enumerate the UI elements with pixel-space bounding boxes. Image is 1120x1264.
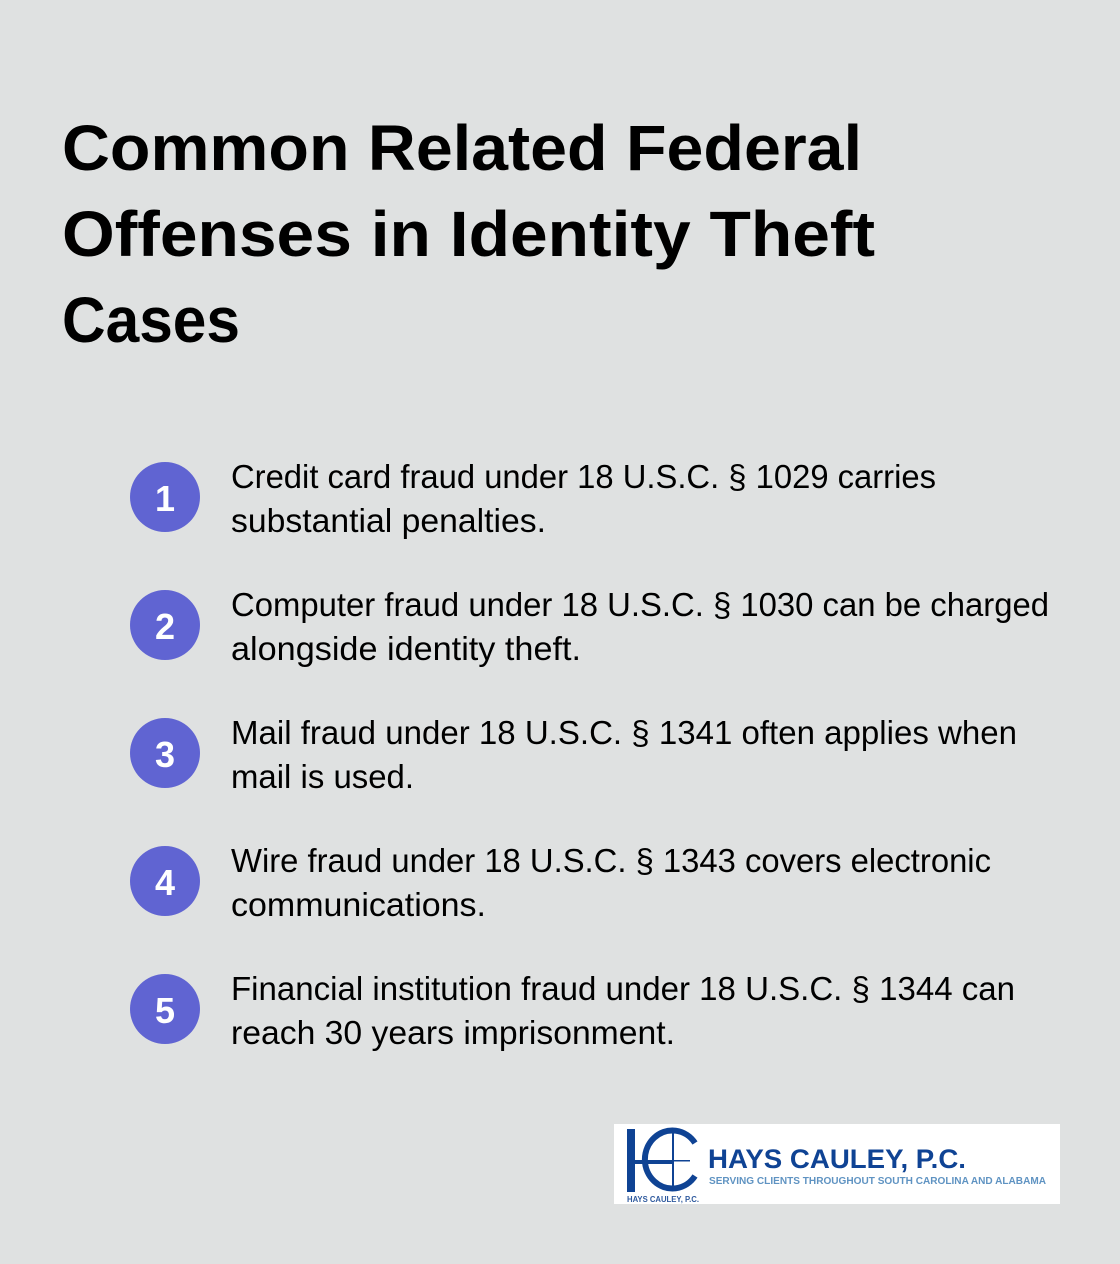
item 4: wire fraud: Wire fraud under 18 U.S.C. § 1343 covers electronic	[231, 842, 991, 879]
item 3: mail fraud	[130, 714, 1017, 795]
item 5: financial institution fraud	[130, 970, 1015, 1051]
item 2: computer fraud: Computer fraud under 18 U.S.C. § 1030 can be charged	[231, 586, 1049, 623]
logo: Hays Cauley, P.C.: SERVING CLIENTS THROUGHOUT SOUTH CAROLINA AND ALABAMA	[709, 1176, 1046, 1187]
logo: Hays Cauley, P.C.	[614, 1124, 1060, 1204]
list of offenses	[130, 458, 1049, 1051]
item 4: wire fraud: 4	[155, 862, 175, 903]
item 3: mail fraud: 3	[155, 734, 175, 775]
item 2: computer fraud: 2	[155, 606, 175, 647]
item 3: mail fraud: Mail fraud under 18 U.S.C. § 1341 often applies when	[231, 714, 1017, 751]
item 1: credit card fraud	[130, 458, 936, 539]
title	[62, 112, 875, 356]
title: Cases	[62, 284, 240, 356]
item 2: computer fraud: alongside identity theft.	[231, 630, 581, 667]
item 1: credit card fraud: substantial penalties.	[231, 502, 546, 539]
item 1: credit card fraud: Credit card fraud under 18 U.S.C. § 1029 carries	[231, 458, 936, 495]
item 2: computer fraud	[130, 586, 1049, 667]
item 4: wire fraud	[130, 842, 991, 923]
item 5: financial institution fraud: Financial institution fraud under 18 U.S.C. § 1344 can	[231, 970, 1015, 1007]
item 3: mail fraud: mail is used.	[231, 758, 414, 795]
logo: Hays Cauley, P.C.: HAYS CAULEY, P.C.	[708, 1144, 966, 1174]
item 5: financial institution fraud: 5	[155, 990, 175, 1031]
item 5: financial institution fraud: reach 30 years imprisonment.	[231, 1014, 675, 1051]
icon: HC monogram	[627, 1129, 695, 1192]
logo: Hays Cauley, P.C.: HAYS CAULEY, P.C.	[627, 1195, 699, 1204]
title: Offenses in Identity Theft	[62, 198, 875, 270]
title: Common Related Federal	[62, 112, 862, 184]
item 4: wire fraud: communications.	[231, 886, 486, 923]
item 1: credit card fraud: 1	[155, 478, 175, 519]
